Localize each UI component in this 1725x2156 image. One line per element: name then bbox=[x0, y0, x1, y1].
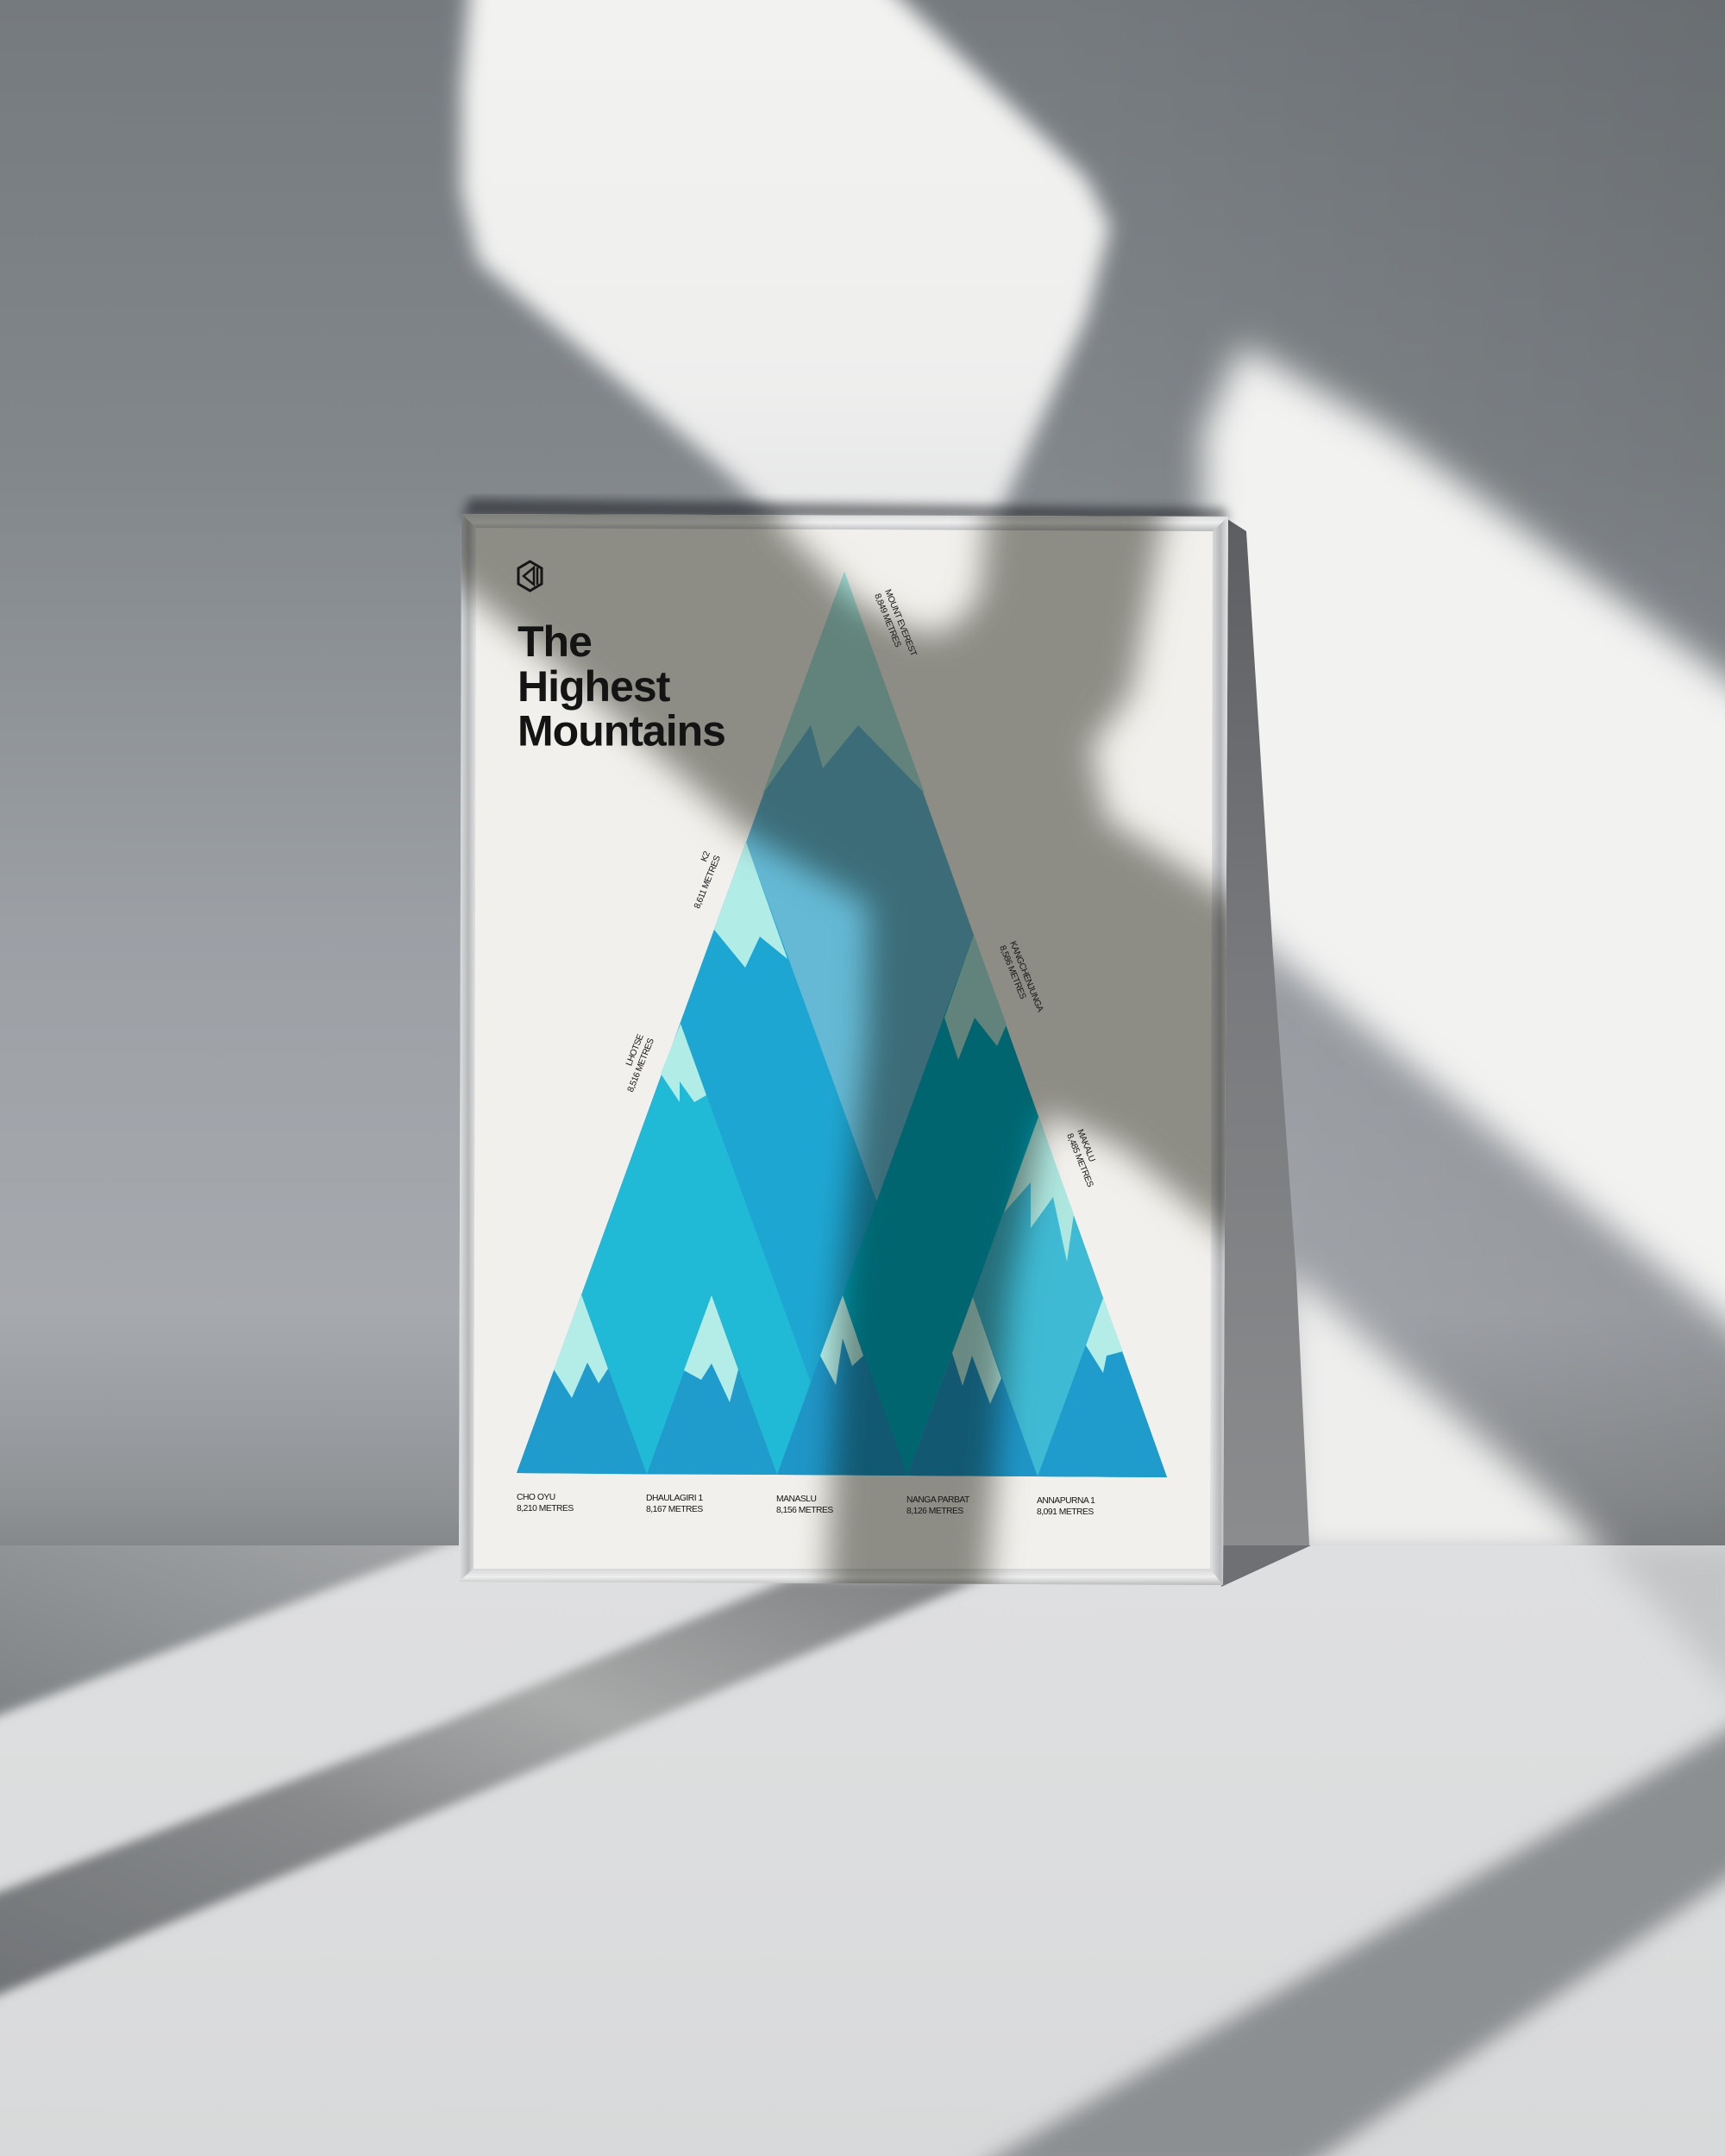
label: Mount Everest: 8,849 METRES bbox=[872, 592, 902, 649]
label: Manaslu bbox=[776, 1495, 833, 1515]
poster cast shadow on wall bbox=[1220, 517, 1309, 1545]
floor shadow bands bbox=[0, 1539, 1725, 2156]
label: Lhotse bbox=[616, 1033, 656, 1094]
mountain: Dhaulagiri bbox=[647, 1295, 777, 1475]
label: Nanga Parbat: NANGA PARBAT bbox=[906, 1495, 970, 1505]
floor with cast light bands bbox=[0, 1535, 1725, 2156]
mountain: K2 bbox=[517, 842, 976, 1476]
frame top rail bbox=[461, 514, 1228, 531]
floor shadow: upper left bbox=[0, 1535, 470, 1725]
label: Makalu: MAKALU bbox=[1075, 1128, 1096, 1163]
frame bottom rail bbox=[459, 1569, 1223, 1585]
label: Dhaulagiri 1: DHAULAGIRI 1 bbox=[646, 1494, 704, 1503]
label: Annapurna 1: 8,091 METRES bbox=[1037, 1507, 1094, 1517]
mountain chart bbox=[517, 572, 1167, 1477]
label: Annapurna 1: ANNAPURNA 1 bbox=[1037, 1496, 1095, 1506]
label: Mount Everest: MOUNT EVEREST bbox=[882, 588, 919, 658]
poster light and shadow overlay bbox=[461, 514, 1226, 1584]
title: Mountains bbox=[518, 707, 725, 755]
poster frame bbox=[459, 514, 1228, 1585]
wall light patches bbox=[461, 0, 1725, 1561]
mountain: Mount Everest bbox=[517, 572, 1167, 1477]
label: Lhotse: LHOTSE bbox=[624, 1033, 646, 1068]
label: Manaslu: MANASLU bbox=[776, 1495, 816, 1504]
label: Nanga Parbat bbox=[906, 1495, 970, 1516]
mountain: Kangchenjunga bbox=[777, 935, 1167, 1477]
label: Cho Oyu: 8,210 METRES bbox=[517, 1504, 574, 1514]
title: The bbox=[518, 617, 592, 666]
mountain: Manaslu bbox=[777, 1295, 907, 1476]
title: Highest bbox=[518, 662, 671, 711]
label: Kangchenjunga: 8,586 METRES bbox=[997, 944, 1027, 1001]
label: Cho Oyu: CHO OYU bbox=[517, 1493, 555, 1502]
label: Makalu bbox=[1064, 1128, 1105, 1189]
logo bbox=[518, 561, 542, 591]
title bbox=[518, 617, 725, 755]
label: Kangchenjunga: KANGCHENJUNGA bbox=[1007, 940, 1044, 1013]
label: Annapurna 1 bbox=[1037, 1496, 1095, 1517]
mountain: Cho Oyu bbox=[517, 1294, 647, 1475]
label: Cho Oyu bbox=[517, 1493, 574, 1514]
label: Dhaulagiri 1 bbox=[646, 1494, 704, 1514]
label: K2: K2 bbox=[699, 849, 712, 863]
mountain: Lhotse bbox=[517, 1024, 844, 1475]
mountain: Nanga Parbat bbox=[907, 1297, 1038, 1476]
mountain: Annapurna bbox=[1038, 1298, 1167, 1477]
background wall bbox=[0, 0, 1725, 1545]
label: Dhaulagiri 1: 8,167 METRES bbox=[646, 1505, 703, 1514]
label: K2 bbox=[682, 849, 723, 910]
label: Lhotse: 8,516 METRES bbox=[626, 1037, 656, 1094]
frame left rail bbox=[459, 514, 476, 1582]
label: Manaslu: 8,156 METRES bbox=[776, 1506, 833, 1515]
mountain: Makalu bbox=[907, 1117, 1167, 1477]
poster sheet bbox=[474, 528, 1213, 1569]
top cast shadow above frame bbox=[461, 498, 1228, 521]
label: K2: 8,611 METRES bbox=[693, 854, 723, 910]
label: Nanga Parbat: 8,126 METRES bbox=[906, 1507, 963, 1516]
label: Makalu: 8,485 METRES bbox=[1064, 1132, 1095, 1189]
frame right rail bbox=[1210, 517, 1228, 1585]
